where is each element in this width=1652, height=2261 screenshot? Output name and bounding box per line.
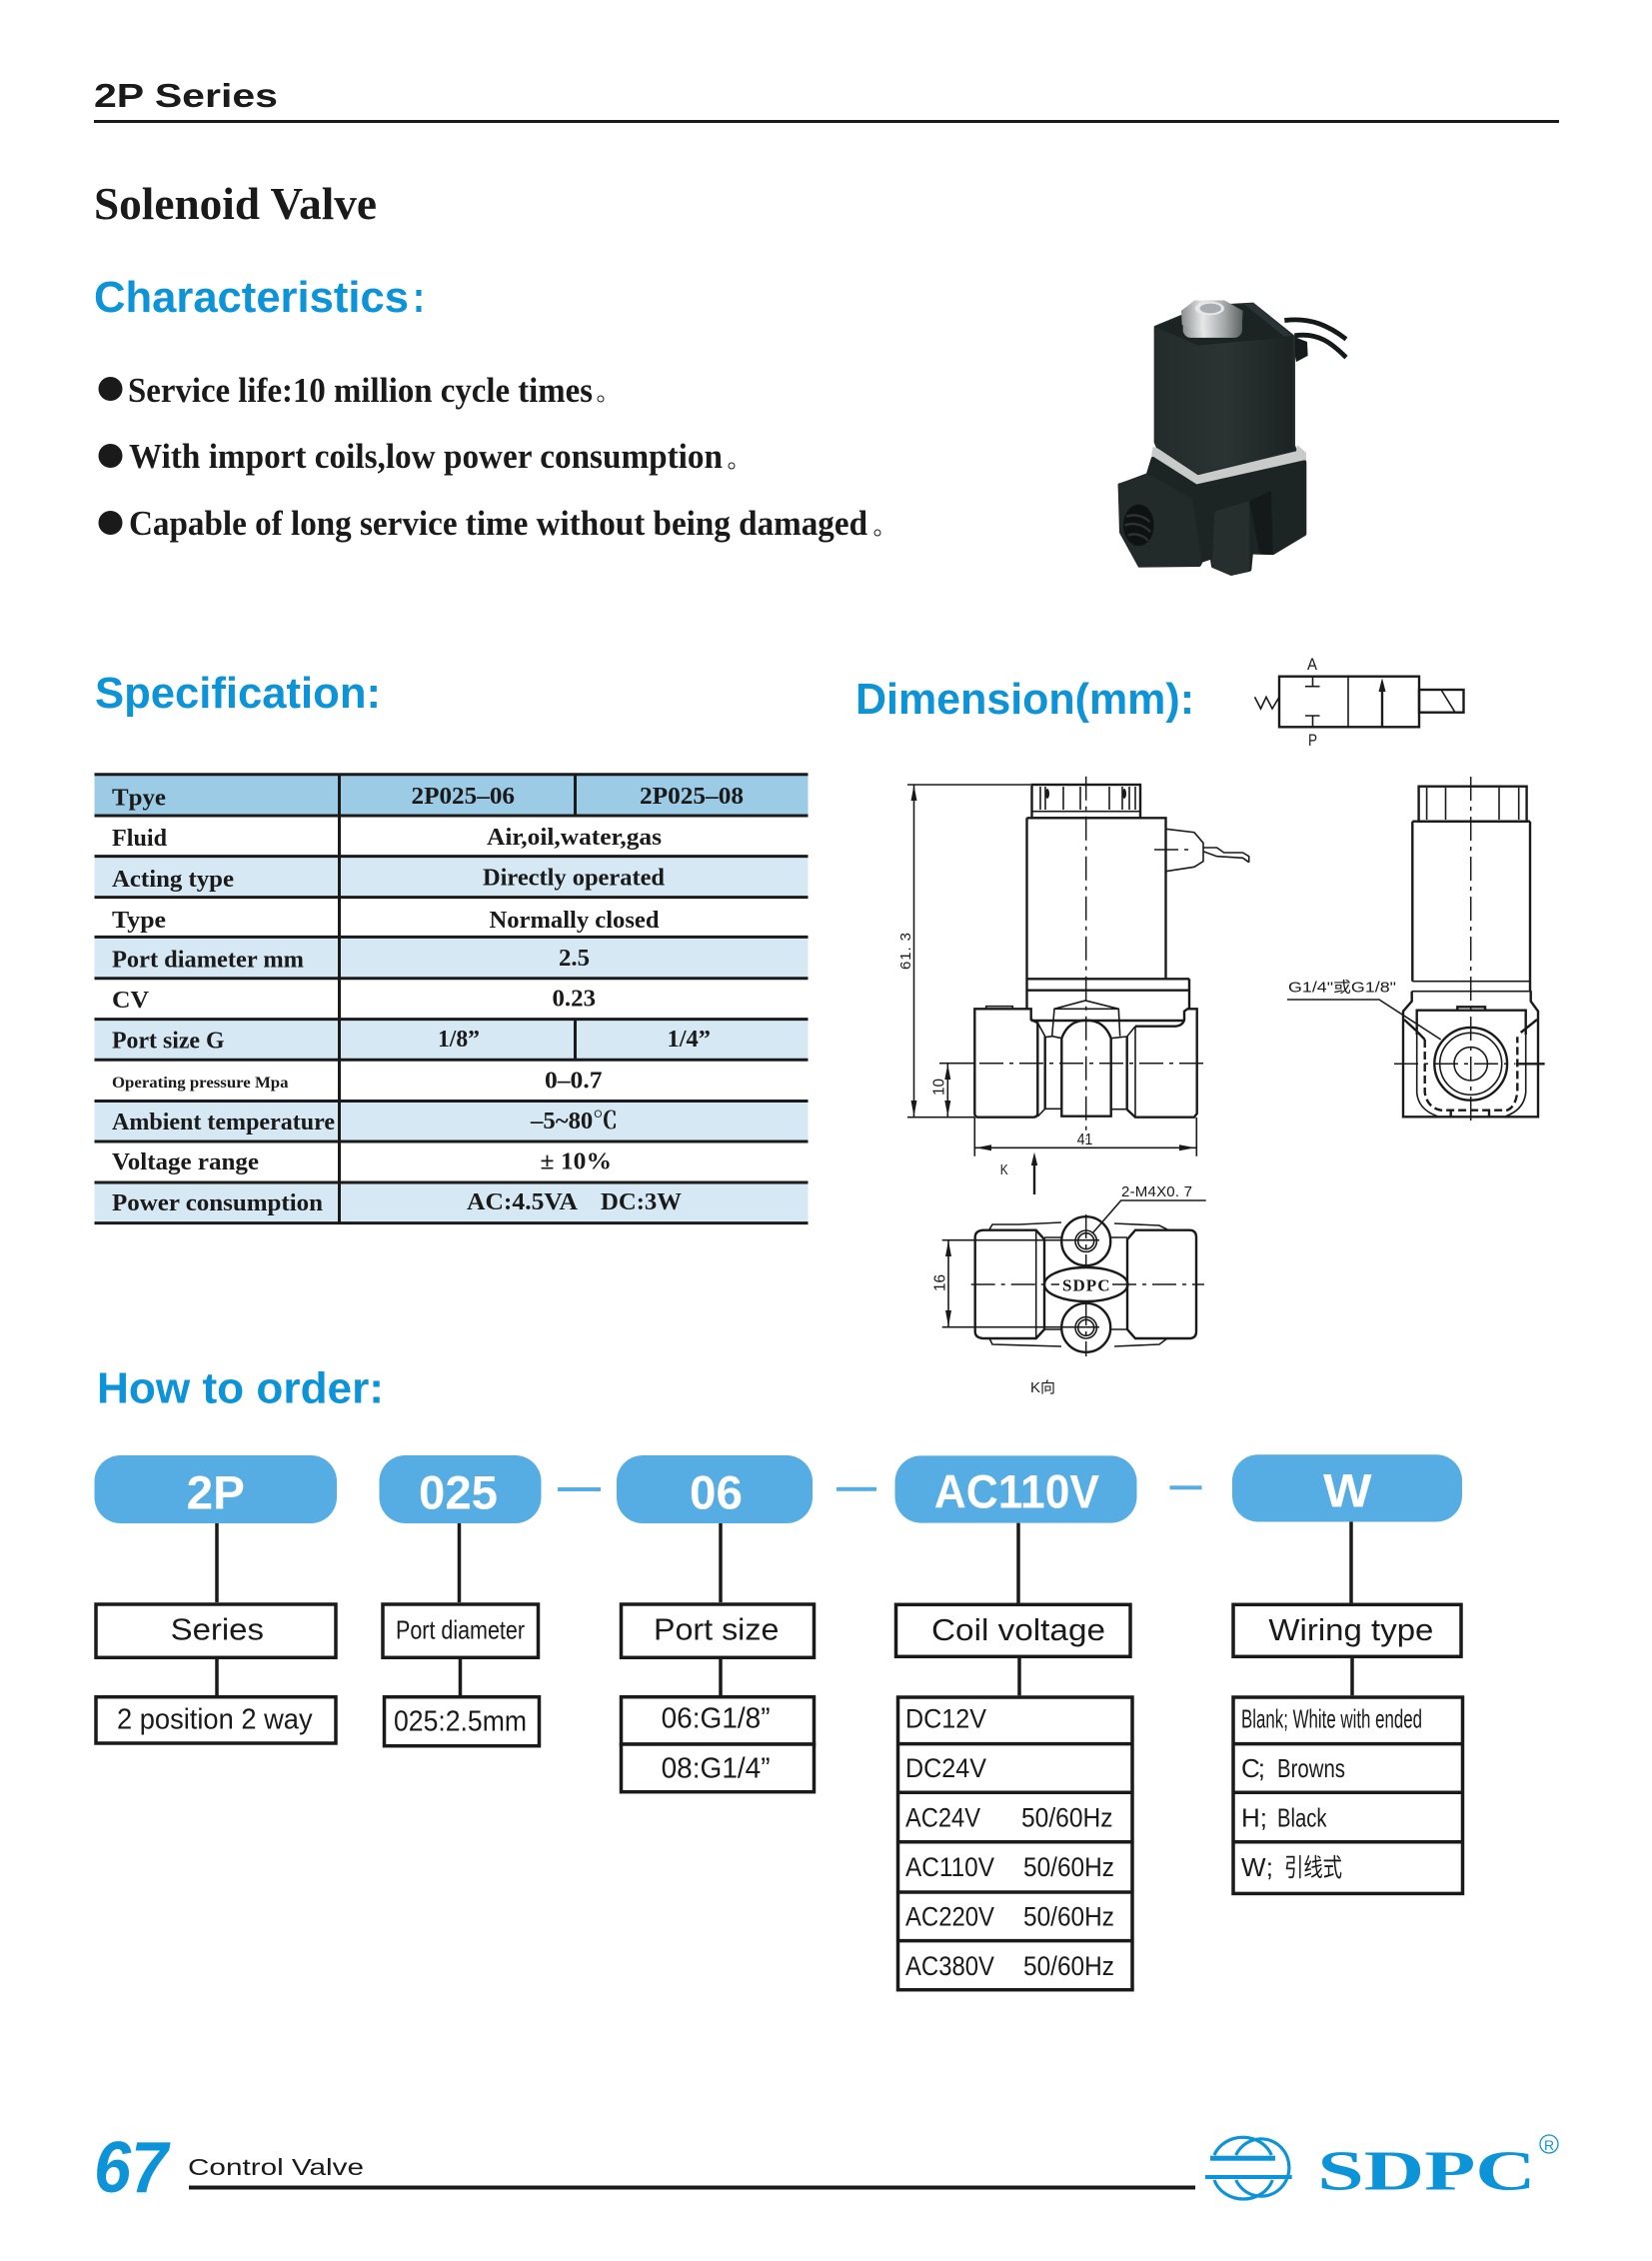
option: AC220V — [905, 1901, 1114, 1931]
title: Solenoid Valve — [94, 178, 377, 229]
option: AC220V: AC220V — [905, 1901, 994, 1931]
row: port size — [112, 1027, 711, 1054]
code pill: 025 — [419, 1465, 498, 1518]
option box — [96, 1697, 336, 1743]
heading: how to order: How to order: — [97, 1363, 384, 1413]
thread callout: 2-M4X0. 7 — [1121, 1183, 1192, 1200]
option: H: H; — [1241, 1803, 1267, 1833]
row: voltage range — [112, 1148, 612, 1175]
product photo: solenoid valve — [1118, 301, 1346, 576]
label: 10: 10 — [931, 1079, 947, 1096]
order column: coil voltage — [895, 1455, 1137, 1990]
label box — [1233, 1604, 1461, 1656]
option: DC12V: DC12V — [905, 1703, 986, 1733]
label box — [622, 1604, 814, 1657]
right port — [1127, 1009, 1197, 1118]
row: ambient temperature — [112, 1109, 618, 1135]
registered mark: R — [1544, 2137, 1554, 2153]
row: power consumption: AC:4.5VA — [467, 1189, 579, 1215]
top view drawing — [931, 1183, 1206, 1396]
series header: 2P Series — [94, 77, 278, 114]
port callout: G1/4"或G1/8" — [1288, 980, 1396, 997]
row: normally closed type — [112, 908, 660, 934]
voltage option list — [897, 1697, 1132, 1990]
row: port size: Port size G — [112, 1028, 225, 1054]
option: AC24V: 50/60Hz — [1021, 1803, 1113, 1833]
row: port diameter: Port diameter mm — [112, 948, 304, 974]
label box — [383, 1604, 538, 1657]
row: operating pressure — [112, 1068, 602, 1094]
dash — [558, 1487, 601, 1491]
option: AC24V — [905, 1803, 1113, 1833]
option box: 06 — [622, 1697, 814, 1744]
row: port diameter — [112, 946, 590, 974]
bullet 3: Capable of long service time without being damaged — [129, 504, 867, 543]
row: ambient temperature: –5~80℃ — [530, 1109, 618, 1134]
row: voltage range: ± 10% — [540, 1148, 612, 1174]
label: 41: 41 — [1077, 1131, 1092, 1148]
label box: Wiring type — [1268, 1612, 1433, 1647]
option: W — [1241, 1852, 1342, 1882]
side view drawing — [1287, 777, 1545, 1123]
bullet 1: Service life:10 million cycle times — [128, 371, 593, 410]
icon: globe mark — [1205, 2137, 1292, 2199]
option: DC24V: DC24V — [905, 1753, 986, 1783]
row: cv: 0.23 — [552, 987, 596, 1013]
code pill — [1232, 1454, 1462, 1521]
option box: 08: 08:G1/4” — [662, 1752, 771, 1784]
dash — [836, 1487, 876, 1491]
row: voltage range: Voltage range — [112, 1149, 259, 1175]
characteristics list — [98, 371, 880, 543]
row: cv — [112, 987, 596, 1014]
option: AC110V: AC110V — [905, 1852, 994, 1882]
option: AC380V: 50/60Hz — [1023, 1951, 1114, 1981]
order column: wiring type — [1232, 1454, 1463, 1893]
option box: 08 — [622, 1744, 814, 1792]
option box: 025:2.5mm — [394, 1706, 527, 1738]
valve symbol — [1255, 655, 1463, 750]
label: 16: 16 — [931, 1274, 949, 1291]
row: port size: 1/8” — [438, 1027, 480, 1053]
row: power consumption: Power consumption — [112, 1190, 323, 1216]
bullet 2: With import coils,low power consumption — [129, 437, 723, 476]
heading: specification: Specification: — [95, 669, 381, 718]
option box — [384, 1697, 540, 1746]
row: fluid — [112, 825, 662, 852]
option: AC220V: 50/60Hz — [1023, 1901, 1114, 1931]
wiring option list — [1232, 1697, 1463, 1893]
neck and dome — [1031, 1020, 1184, 1022]
option: AC110V — [905, 1852, 1114, 1882]
footer: section label and rule: Control Valve — [188, 2154, 364, 2180]
option box: 06: 06:G1/8” — [662, 1703, 771, 1735]
option: W: 引线式 — [1284, 1854, 1342, 1882]
registered mark — [1540, 2135, 1558, 2153]
label: 61.3: 61. 3 — [897, 933, 914, 970]
footer: section label and rule — [188, 2154, 1195, 2189]
code pill — [617, 1455, 813, 1523]
heading: dimension: Dimension(mm): — [855, 675, 1194, 724]
series header — [94, 77, 1559, 123]
dash — [1169, 1485, 1201, 1489]
valve symbol: P — [1308, 731, 1317, 750]
row: acting type: Directly operated — [483, 865, 666, 891]
row: cv: CV — [112, 988, 150, 1014]
front view drawing — [939, 777, 1249, 1139]
heading: characteristics: Characteristics — [94, 273, 409, 322]
order column: series — [94, 1455, 337, 1743]
wordmark: SDPC — [1317, 2141, 1536, 2203]
option: W: W; — [1241, 1852, 1273, 1882]
option: H: Black — [1277, 1803, 1327, 1833]
option: C — [1241, 1753, 1345, 1783]
row: power consumption — [112, 1189, 682, 1216]
row: acting type — [112, 865, 666, 893]
row: fluid: Fluid — [112, 826, 168, 852]
row: port size: 1/4” — [668, 1027, 711, 1053]
left port — [974, 1009, 1037, 1118]
label: K view: K向 — [1030, 1379, 1055, 1396]
arrow: K view — [1031, 1152, 1037, 1194]
row: type header: Tpye — [112, 785, 166, 811]
label box: Port diameter — [396, 1614, 525, 1644]
valve symbol: A — [1307, 655, 1318, 674]
option: AC24V: AC24V — [905, 1803, 980, 1833]
row: fluid: Air,oil,water,gas — [487, 825, 662, 851]
port callout — [1287, 980, 1441, 1040]
label box — [895, 1604, 1130, 1656]
option: C: C; — [1241, 1753, 1265, 1783]
row: port diameter: 2.5 — [559, 946, 590, 972]
footer: SDPC logo — [1205, 2135, 1558, 2203]
code pill: 06 — [690, 1465, 743, 1518]
row: normally closed type: Type — [112, 908, 166, 934]
order column: port size — [617, 1455, 814, 1792]
label box: Coil voltage — [931, 1612, 1105, 1647]
row: power consumption: DC:3W — [601, 1189, 682, 1215]
code pill: W — [1323, 1464, 1372, 1517]
option: AC380V — [905, 1951, 1114, 1981]
code pill: 2P — [187, 1465, 245, 1518]
row: normally closed type: Normally closed — [490, 908, 660, 934]
label box: Port size — [654, 1612, 779, 1647]
option: H — [1241, 1803, 1327, 1833]
heading: characteristics: : — [413, 273, 425, 322]
logo mark on valve: SDPC — [1062, 1275, 1109, 1295]
thread callout — [1092, 1183, 1206, 1233]
label box — [96, 1604, 336, 1657]
row: type header — [112, 784, 744, 811]
option: C: Browns — [1277, 1753, 1345, 1783]
label box: Series — [171, 1612, 264, 1647]
code pill — [94, 1455, 337, 1523]
option: AC110V: 50/60Hz — [1023, 1852, 1114, 1882]
row: acting type: Acting type — [112, 867, 234, 893]
label: K: K — [1000, 1161, 1008, 1178]
code pill: AC110V — [934, 1464, 1100, 1517]
order column: port diameter — [380, 1455, 542, 1746]
dimension lines — [897, 785, 1196, 1194]
row: operating pressure: Operating pressure Mpa — [112, 1075, 288, 1092]
option: AC380V: AC380V — [905, 1951, 994, 1981]
code pill — [380, 1455, 542, 1523]
code pill — [895, 1455, 1137, 1523]
specification table — [94, 775, 808, 1223]
option: blank: Blank; White with ended — [1241, 1703, 1422, 1733]
row: operating pressure: 0–0.7 — [545, 1068, 602, 1094]
option box: 2 position 2 way — [117, 1703, 313, 1735]
row: type header: 2P025–08 — [640, 784, 744, 810]
footer: page number: 67 — [94, 2128, 171, 2208]
row: ambient temperature: Ambient temperature — [112, 1110, 335, 1135]
row: type header: 2P025–06 — [412, 784, 515, 810]
